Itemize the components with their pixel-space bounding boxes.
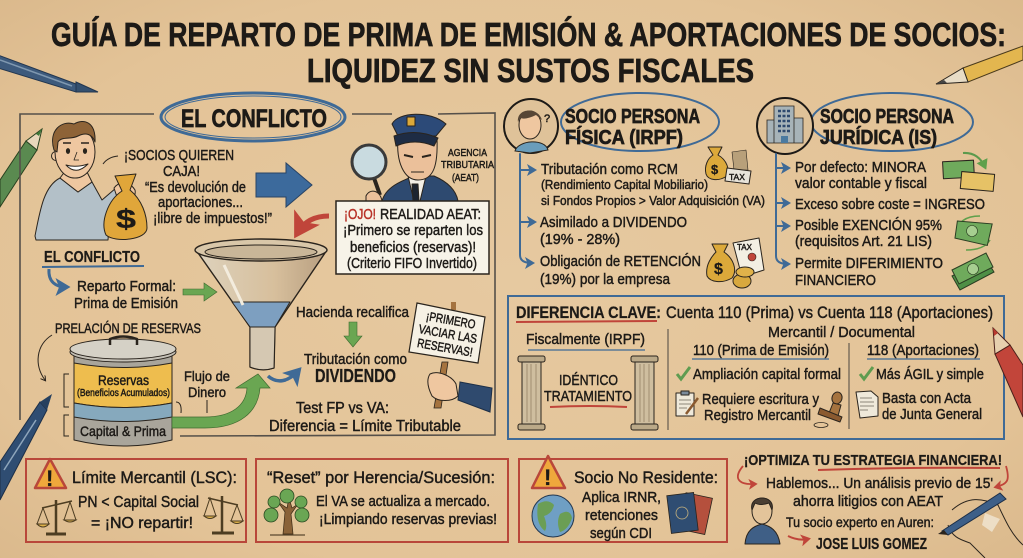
text: fisica bullets: (Rendimiento Capital Mobiliario) bbox=[541, 178, 708, 192]
text: juridica bullets: Permite DIFERIMIENTO bbox=[795, 255, 943, 272]
pencil: red right bbox=[993, 328, 1023, 417]
column: fiscalmente: IDÉNTICO bbox=[559, 372, 618, 389]
text: fisica bullets: (19%) por la empresa bbox=[540, 271, 671, 288]
connectors: juridica tree bbox=[776, 154, 788, 264]
text: juridica bullets: Posible EXENCIÓN 95% bbox=[795, 217, 942, 234]
speech: socios quieren caja bbox=[103, 147, 272, 227]
text: juridica bullets: (requisitos Art. 21 LIS) bbox=[795, 233, 932, 250]
text: contact: JOSE LUIS GOMEZ bbox=[816, 536, 927, 553]
icon: left column bbox=[518, 356, 545, 430]
heading: el conflicto bbox=[161, 93, 345, 141]
heading: persona fisica bbox=[504, 93, 719, 153]
icon: funnel bbox=[195, 239, 327, 370]
text: contact bbox=[786, 515, 934, 553]
callout: realidad aeat: REALIDAD AEAT: bbox=[380, 206, 481, 223]
column: fiscalmente: Fiscalmente (IRPF) bbox=[526, 331, 645, 348]
speech: socios quieren caja: ¡SOCIOS QUIEREN bbox=[124, 147, 234, 164]
icon: advisor bbox=[745, 498, 780, 544]
arrow: red to funnel bbox=[298, 216, 329, 232]
icon: money bag and tax tag: TAX bbox=[729, 172, 745, 182]
label: flujo de dinero: Flujo de bbox=[184, 368, 230, 384]
callout: realidad aeat: ¡OJO! bbox=[344, 206, 376, 223]
callout: realidad aeat: (Criterio FIFO Invertido) bbox=[347, 255, 477, 272]
heading: persona fisica: ? bbox=[544, 113, 550, 125]
panel: reset por herencia bbox=[256, 459, 508, 542]
icon: check bbox=[860, 367, 873, 379]
heading: diferencia clave bbox=[516, 303, 993, 322]
callout: realidad aeat bbox=[336, 201, 489, 274]
speech: socios quieren caja: “Es devolución de bbox=[145, 179, 246, 196]
callout: realidad aeat: ¡Primero se reparten los bbox=[343, 222, 483, 239]
text: reset bbox=[267, 468, 497, 528]
icon: tree bbox=[264, 489, 309, 535]
heading: el conflicto: EL CONFLICTO bbox=[181, 105, 327, 133]
label: flujo de dinero: Dinero bbox=[188, 384, 226, 400]
icon: globe bbox=[532, 495, 574, 537]
speech: socios quieren caja: CAJA! bbox=[163, 163, 200, 180]
icon: check bbox=[677, 367, 690, 379]
text: hacienda recalifica: DIVIDENDO bbox=[315, 366, 396, 386]
text: fisica bullets: Obligación de RETENCIÓN bbox=[540, 253, 701, 270]
callout: realidad aeat: beneficios (reservas)! bbox=[350, 239, 476, 256]
icon: clipboard bbox=[676, 391, 698, 416]
panel: el conflicto bbox=[20, 93, 495, 446]
column: 110 prima de emision: Ampliación capital formal bbox=[693, 366, 841, 383]
icon: stack of banknotes bbox=[952, 253, 994, 290]
icon: scales right bbox=[204, 496, 243, 533]
arrow: green to funnel bbox=[183, 283, 217, 301]
chart: reserves barrel: (Beneficios Acumulados) bbox=[77, 388, 170, 399]
text: test fp vs va: Diferencia = Límite Tributable bbox=[269, 418, 461, 435]
icon: money bag and tax tag: $ bbox=[711, 162, 719, 177]
column: 118 aportaciones: 118 (Aportaciones) bbox=[867, 342, 979, 359]
heading: persona juridica bbox=[757, 93, 973, 154]
panel: socio no residente bbox=[519, 456, 727, 542]
text: no residente bbox=[574, 469, 718, 542]
text: hablemos: Hablemos... Un análisis previo de 15' bbox=[766, 475, 993, 492]
icon: right column bbox=[631, 356, 658, 430]
text: no residente: retenciones bbox=[585, 508, 658, 524]
icon: socio with money bag bbox=[35, 121, 147, 240]
icon: exchanging banknotes bbox=[943, 153, 995, 191]
label: agencia tributaria: TRIBUTARIA bbox=[441, 160, 494, 171]
text: no residente: según CDI bbox=[590, 526, 652, 542]
text: hacienda recalifica bbox=[296, 304, 410, 386]
sign: primero vaciar las reservas: RESERVAS! bbox=[416, 336, 474, 360]
text: hablemos: ahorra litigios con AEAT bbox=[793, 493, 943, 510]
text: limite mercantil: Límite Mercantil (LSC): bbox=[72, 468, 237, 487]
icon: warning: ! bbox=[544, 465, 551, 490]
heading: persona juridica: JURÍDICA (IS) bbox=[820, 126, 937, 149]
arrow: blue to aeat bbox=[256, 163, 312, 207]
column: 118 aportaciones: de Junta General bbox=[882, 406, 982, 423]
icon: money bag and tax tag bbox=[705, 147, 751, 184]
title: LIQUIDEZ SIN SUSTOS FISCALES bbox=[307, 52, 754, 89]
text: juridica bullets: Por defecto: MINORA bbox=[795, 159, 926, 176]
column: 118 aportaciones bbox=[856, 342, 984, 423]
text: reset: “Reset” por Herencia/Sucesión: bbox=[267, 468, 495, 487]
text: test fp vs va: Test FP vs VA: bbox=[296, 400, 389, 417]
text: hacienda recalifica: Hacienda recalifica bbox=[296, 304, 410, 321]
icon: document bbox=[856, 391, 878, 418]
label: agencia tributaria bbox=[441, 148, 494, 184]
text: fisica bullets bbox=[540, 161, 765, 288]
text: reparto formal bbox=[74, 278, 178, 312]
column: 110 prima de emision: Registro Mercantil bbox=[704, 407, 811, 424]
icon: passports bbox=[667, 492, 712, 534]
icon: bag, coins and tax document: $ bbox=[714, 261, 723, 278]
text: reparto formal: Prima de Emisión bbox=[74, 295, 178, 312]
icon: bag, coins and tax document bbox=[707, 238, 764, 288]
subheading: el conflicto: EL CONFLICTO bbox=[44, 249, 140, 266]
label: prelacion de reservas: PRELACIÓN DE RESERVAS bbox=[55, 321, 201, 336]
heading: diferencia clave: DIFERENCIA CLAVE: bbox=[516, 303, 661, 322]
text: juridica bullets: FINANCIERO bbox=[795, 272, 876, 289]
text: hacienda recalifica: Tributación como bbox=[304, 351, 407, 368]
pencil: green left bbox=[0, 129, 42, 207]
sign: primero vaciar las reservas bbox=[409, 302, 492, 412]
heading: persona juridica: SOCIO PERSONA bbox=[820, 106, 954, 128]
text: limite mercantil: = ¡NO repartir! bbox=[91, 515, 193, 532]
arrow: blue to dividendo bbox=[268, 371, 298, 381]
column: fiscalmente bbox=[518, 331, 658, 430]
title bbox=[51, 16, 1006, 89]
text: hablemos bbox=[766, 475, 993, 510]
icon: bag, coins and tax document: TAX bbox=[737, 243, 753, 252]
text: juridica bullets: valor contable y fiscal bbox=[795, 175, 927, 192]
text: fisica bullets: (19% - 28%) bbox=[540, 231, 620, 248]
speech: socios quieren caja: ¡libre de impuestos!” bbox=[153, 210, 272, 227]
label: agencia tributaria: AGENCIA bbox=[448, 148, 487, 159]
column: 110 prima de emision: 110 (Prima de Emisión) bbox=[693, 342, 829, 359]
text: reset: El VA se actualiza a mercado. bbox=[316, 494, 490, 510]
chart: reserves barrel bbox=[64, 336, 176, 446]
text: fisica bullets: Tributación como RCM bbox=[541, 161, 678, 178]
heading: diferencia clave: Cuenta 110 (Prima) vs Cuenta 118 (Aportaciones) bbox=[666, 304, 993, 322]
text: juridica bullets: Exceso sobre coste = INGRESO bbox=[795, 196, 985, 213]
icon: tax inspector bbox=[352, 114, 458, 201]
column: fiscalmente: TRATAMIENTO bbox=[544, 388, 632, 405]
marker: blue left bbox=[0, 394, 52, 500]
text: contact: Tu socio experto en Auren: bbox=[786, 515, 934, 530]
panel: socio persona juridica bbox=[757, 93, 995, 290]
label: prelacion de reservas bbox=[38, 321, 201, 380]
arrow: green money flow bbox=[172, 374, 270, 428]
text: no residente: Socio No Residente: bbox=[574, 469, 718, 487]
icon: banknote with arrows bbox=[952, 213, 994, 250]
text: limite mercantil: PN < Capital Social bbox=[78, 494, 199, 511]
icon: warning: ! bbox=[46, 466, 53, 491]
heading: mercantil documental: Mercantil / Documental bbox=[768, 324, 915, 341]
pen: top left bbox=[0, 55, 98, 92]
sign: primero vaciar las reservas: VACIAR LAS bbox=[418, 322, 478, 346]
text: juridica bullets bbox=[795, 159, 985, 289]
speech: socios quieren caja: aportaciones... bbox=[158, 194, 243, 211]
text: test fp vs va bbox=[269, 400, 461, 435]
text: limite mercantil bbox=[72, 468, 237, 532]
heading: persona fisica: FÍSICA (IRPF) bbox=[565, 126, 683, 149]
column: 118 aportaciones: Basta con Acta bbox=[882, 390, 972, 407]
panel: socio persona fisica bbox=[504, 93, 765, 288]
pencil: top right bbox=[936, 46, 1023, 84]
icon: warning bbox=[35, 459, 66, 491]
label: agencia tributaria: (AEAT) bbox=[452, 173, 479, 184]
text: reparto formal: Reparto Formal: bbox=[77, 278, 176, 295]
arrows: red curved bbox=[738, 466, 1008, 487]
chart: reserves barrel: Reservas bbox=[98, 372, 149, 388]
text: fisica bullets: Asimilado a DIVIDENDO bbox=[540, 214, 687, 231]
column: 110 prima de emision: Requiere escritura y bbox=[702, 391, 819, 408]
panel: diferencia clave bbox=[508, 296, 1004, 439]
icon: scales left bbox=[37, 500, 76, 534]
text: reset: ¡Limpiando reservas previas! bbox=[319, 512, 497, 528]
icon: socio with money bag: $ bbox=[116, 204, 136, 234]
subheading: el conflicto bbox=[42, 249, 144, 287]
text: fisica bullets: si Fondos Propios > Valor Adquisición (VA) bbox=[541, 194, 765, 208]
chart: reserves barrel: Capital & Prima bbox=[80, 423, 166, 439]
column: 118 aportaciones: Más ÁGIL y simple bbox=[876, 366, 984, 383]
panel: limite mercantil bbox=[26, 459, 246, 542]
panel: call to action bbox=[738, 452, 1023, 558]
connectors: fisica tree bbox=[520, 154, 534, 263]
icon: warning bbox=[532, 456, 565, 490]
text: no residente: Aplica IRNR, bbox=[582, 490, 661, 506]
icon: stamp bbox=[814, 391, 843, 428]
icon: hand with pen bbox=[938, 493, 1023, 558]
column: 110 prima de emision bbox=[676, 342, 980, 428]
sign: primero vaciar las reservas: ¡PRIMERO bbox=[425, 309, 477, 332]
label: flujo de dinero bbox=[176, 368, 230, 413]
heading: persona fisica: SOCIO PERSONA bbox=[565, 106, 700, 128]
